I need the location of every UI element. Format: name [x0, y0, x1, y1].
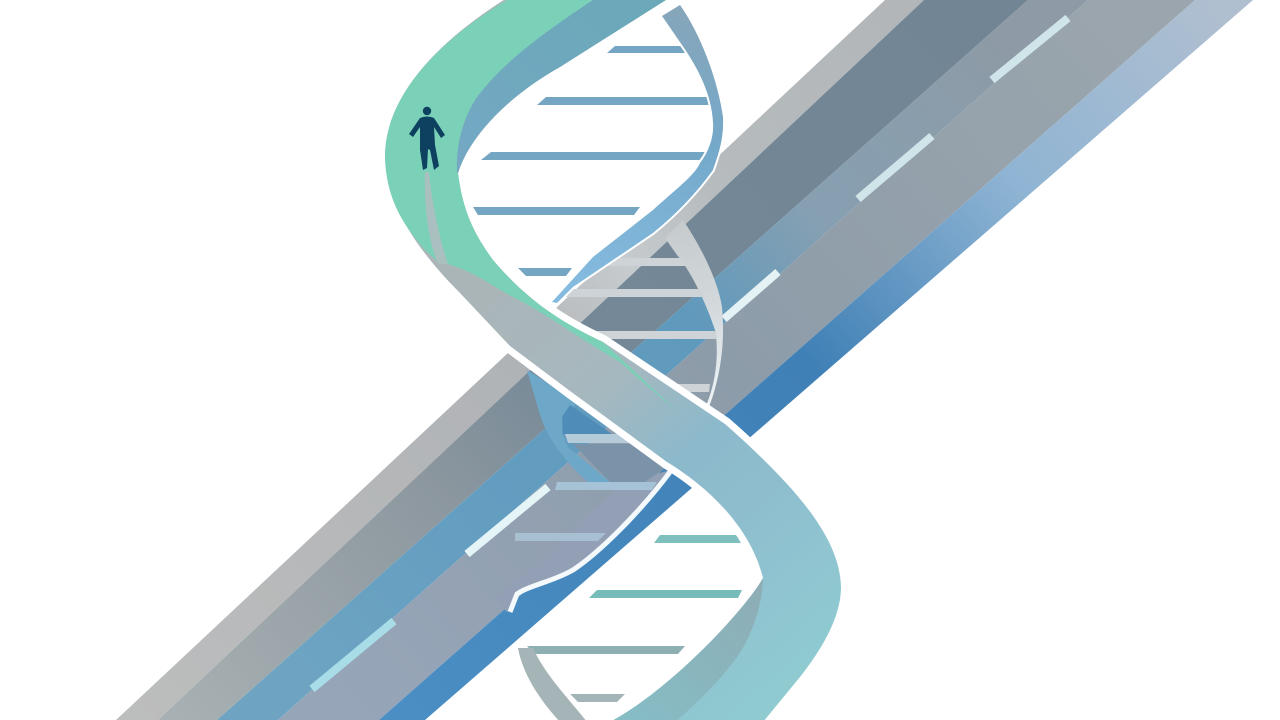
road edge band — [379, 0, 1253, 720]
road surface upper lane — [217, 0, 1088, 720]
white strand edge — [510, 472, 670, 612]
lower back strand over road — [527, 370, 610, 482]
gray-blue patch below rung — [573, 444, 667, 482]
lower gray strand — [518, 648, 587, 720]
ribbon inner shade bottom — [610, 578, 763, 720]
upper gray rungs — [566, 258, 717, 392]
person body — [409, 116, 445, 170]
road centre dashes — [312, 18, 1068, 689]
lower teal and gray rungs — [527, 535, 743, 702]
person head — [423, 107, 431, 115]
road wall — [158, 0, 1028, 720]
road curb — [116, 0, 924, 720]
ribbon inner shade top — [457, 0, 666, 173]
footprint shadow trail — [425, 172, 448, 264]
top blue rungs — [473, 46, 714, 276]
darker patch between rungs — [562, 405, 612, 434]
road bulge under lower strand — [495, 470, 670, 612]
road surface lower lane — [278, 0, 1195, 720]
upper gray back strand — [665, 220, 723, 412]
icon: walking person — [409, 107, 445, 170]
DNA front ribbon — [385, 0, 841, 720]
ribbon silhouette — [385, 0, 841, 720]
lower strand rungs over road — [515, 434, 657, 541]
top blue back strand — [552, 5, 723, 303]
ribbon teal face — [385, 0, 678, 412]
